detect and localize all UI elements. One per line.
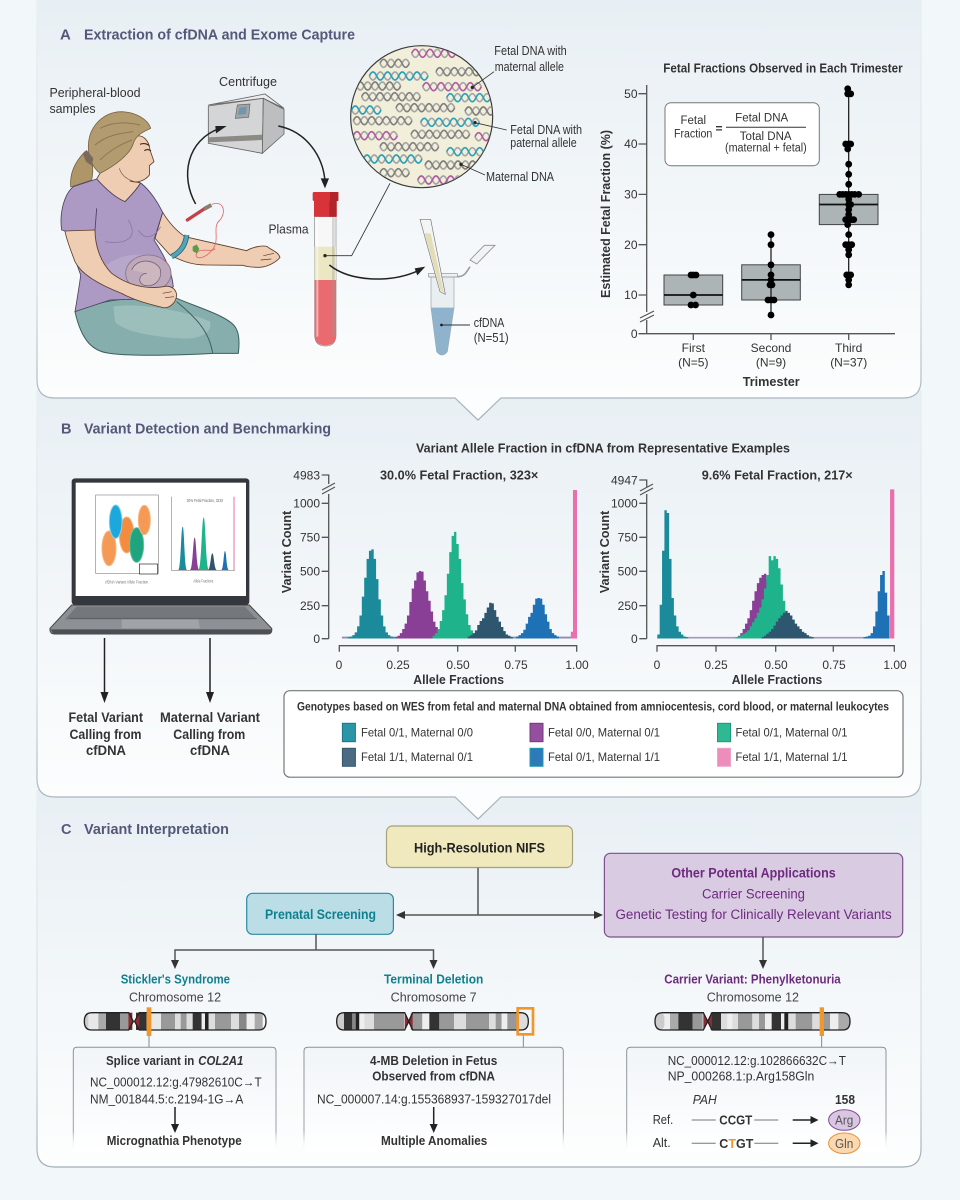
chart: fetal fractions boxplot — [598, 62, 903, 389]
panel B: variant detection — [37, 390, 921, 819]
y axis: 4947 — [611, 474, 638, 488]
y axis — [611, 474, 653, 646]
pants — [75, 298, 239, 355]
y axis — [293, 468, 335, 646]
text: carrier nomenclature: NP_000268.1:p.Arg158Gln — [668, 1070, 814, 1084]
chart: 9.6% fetal fraction histogram — [597, 467, 907, 687]
x axis: 0.75 — [504, 658, 528, 672]
y axis — [624, 85, 895, 341]
heading B: B — [61, 421, 71, 437]
laptop histogram — [172, 497, 235, 584]
neck and face — [97, 136, 154, 202]
label: fetal DNA with maternal allele — [494, 44, 567, 74]
text: variant nomenclature: NM_001844.5:c.2194-1G→A — [90, 1092, 244, 1106]
legend item: fetal 1/1 maternal 1/1: Fetal 1/1, Maternal 1/1 — [736, 750, 848, 764]
y axis: 0 — [631, 327, 638, 341]
histogram bars — [342, 490, 577, 638]
connector arrows from Prenatal Screening — [171, 934, 438, 969]
x axis labels: (N=37) — [830, 356, 867, 370]
formula box — [665, 103, 819, 166]
y axis title: Estimated Fetal Fraction (%) — [598, 130, 613, 298]
x axis title: Allele Fractions — [732, 672, 822, 687]
panel A: extraction of cfDNA — [37, 0, 921, 420]
y axis title: Variant Count — [597, 510, 612, 593]
y axis: 4983 — [293, 468, 320, 482]
legend item: fetal 1/1 maternal 1/1 — [718, 748, 848, 766]
arrow from Other Applications — [759, 937, 767, 969]
Terminal deletion column — [304, 971, 563, 1152]
box: Other Potential Applications — [604, 853, 903, 937]
alternate row: Alt. — [653, 1136, 671, 1150]
x axis labels: (N=5) — [678, 356, 708, 370]
laptop histogram: Allele Fractions — [193, 579, 214, 584]
formula box: Fetal — [681, 115, 706, 127]
box: second trimester — [742, 231, 800, 318]
legend item: fetal 0/1 maternal 1/1 — [530, 748, 660, 766]
label: maternal variant calling: cfDNA — [190, 743, 230, 758]
heading A: A — [60, 26, 71, 44]
icon: blood tube — [313, 192, 338, 346]
x axis — [336, 646, 589, 672]
label: fetal variant calling: cfDNA — [86, 743, 126, 758]
text: 4-MB deletion — [370, 1054, 497, 1084]
box: Other Potential Applications: Genetic Testing for Clinically Relevant Variants — [616, 907, 892, 922]
hair — [88, 112, 151, 173]
text: carrier nomenclature: NC_000012.12:g.102866632C→T — [668, 1054, 846, 1068]
text: carrier nomenclature — [668, 1054, 846, 1084]
x axis labels: Second — [751, 341, 791, 355]
leader: plasma to magnified circle — [324, 183, 390, 257]
y axis title: Variant Count — [279, 510, 294, 593]
icon: centrifuge — [208, 94, 284, 153]
text: variant nomenclature — [90, 1076, 262, 1106]
chart subtitle: 30.0% Fetal Fraction, 323× — [380, 467, 539, 482]
y axis: 250 — [618, 599, 638, 613]
connector arrows from NIFS — [396, 868, 603, 919]
formula box: Total DNA — [740, 131, 792, 143]
x axis: 0.75 — [822, 658, 846, 672]
x axis labels — [678, 341, 867, 370]
legend item: fetal 0/1 maternal 0/1 — [718, 723, 848, 742]
Stickler's syndrome column — [73, 971, 276, 1152]
label: peripheral blood samples: samples — [50, 102, 96, 116]
label: centrifuge: Centrifuge — [219, 75, 277, 89]
shirt — [61, 179, 173, 312]
text: splice variant: Splice variant in — [106, 1054, 194, 1068]
x axis: 1.00 — [883, 658, 907, 672]
chart title: Fetal Fractions Observed in Each Trimester — [663, 62, 903, 76]
alternate row — [653, 1133, 860, 1154]
x axis: 0.25 — [704, 658, 728, 672]
label: maternal DNA: Maternal DNA — [486, 170, 555, 184]
reference row: Arg — [835, 1114, 853, 1128]
y axis: 750 — [300, 530, 320, 544]
chart subtitle: 9.6% Fetal Fraction, 217× — [702, 467, 853, 482]
text: PAH gene label: PAH — [693, 1093, 718, 1107]
label: fetal DNA with paternal allele — [510, 123, 582, 150]
arrow: sample to centrifuge — [188, 126, 227, 204]
x axis: 0 — [654, 658, 661, 672]
x axis: 0.25 — [386, 658, 410, 672]
label: Terminal Deletion: Terminal Deletion — [384, 971, 483, 986]
label: maternal variant calling: Calling from — [173, 727, 245, 742]
label: plasma: Plasma — [268, 222, 309, 236]
label: cfDNA count: cfDNA — [474, 316, 505, 330]
chromosome 12 ideogram — [84, 1007, 266, 1047]
text: deletion nomenclature: NC_000007.14:g.155368937-159327017del — [317, 1092, 551, 1106]
heading C: Variant Interpretation — [84, 822, 229, 838]
label: fetal DNA with paternal allele: Fetal DNA with — [510, 123, 582, 137]
y axis: 0 — [313, 632, 320, 646]
text: splice variant — [106, 1054, 243, 1068]
label: Stickler's Syndrome: Stickler's Syndrome — [121, 971, 230, 986]
arm extended with hand — [155, 212, 280, 267]
y axis: 10 — [624, 288, 638, 302]
label: carrier variant: Carrier Variant: Phenylketonuria — [664, 971, 841, 986]
label: fetal DNA with maternal allele: maternal allele — [495, 60, 564, 74]
x axis labels: First — [682, 341, 706, 355]
box: High-Resolution NIFS: High-Resolution NIFS — [414, 839, 545, 855]
arm on belly with hand — [65, 230, 177, 308]
label: fetal DNA with maternal allele: Fetal DNA with — [494, 44, 567, 58]
y axis: 500 — [300, 564, 320, 578]
chart title: Variant Allele Fraction in cfDNA from Representative Examples — [416, 441, 790, 456]
reference row: CCGT — [719, 1114, 753, 1128]
laptop histogram: 30% Fetal Fraction, 323X — [187, 498, 224, 503]
label: maternal variant calling: Maternal Variant — [160, 710, 260, 725]
text: variant nomenclature: NC_000012.12:g.47982610C→T — [90, 1076, 262, 1090]
icon: microtube with pipette — [420, 219, 495, 355]
formula box: = — [716, 122, 723, 136]
label: maternal variant calling — [160, 710, 260, 758]
ponytail — [71, 152, 93, 187]
y axis: 50 — [624, 87, 638, 101]
label: fetal variant calling — [68, 710, 143, 758]
arrow down — [430, 1107, 438, 1133]
belly with fetus — [126, 255, 171, 292]
legend title: Genotypes based on WES from fetal and maternal DNA obtained from amniocentesis, cord blood, or maternal leukocytes — [297, 702, 889, 714]
label: Chromosome 7: Chromosome 7 — [391, 991, 477, 1005]
legend item: fetal 0/1 maternal 0/0 — [342, 723, 473, 742]
box: High-Resolution NIFS — [386, 826, 572, 868]
box: Other Potential Applications: Other Potental Applications — [671, 866, 836, 881]
leaders from DNA circle — [460, 72, 507, 175]
arm band — [172, 235, 187, 257]
arrow: centrifuge to tube — [278, 126, 329, 188]
y axis: 750 — [618, 530, 638, 544]
chromosome 12 ideogram — [655, 1007, 850, 1047]
label: peripheral blood samples — [50, 86, 141, 116]
box: Other Potential Applications: Carrier Screening — [702, 886, 805, 901]
heading B: Variant Detection and Benchmarking — [84, 421, 331, 437]
x axis: 1.00 — [565, 658, 589, 672]
legend: genotypes — [284, 691, 903, 777]
text: codon 158: 158 — [835, 1093, 855, 1107]
Carrier variant column — [627, 971, 886, 1154]
formula box: Fraction — [674, 128, 712, 140]
box: Prenatal Screening — [247, 893, 393, 934]
blood tube and tubing — [196, 203, 223, 258]
magnified DNA circle — [351, 46, 504, 188]
text: splice variant: COL2A1 — [198, 1054, 243, 1068]
x axis — [654, 646, 907, 672]
y axis: 30 — [624, 188, 638, 202]
label: cfDNA count — [440, 316, 509, 345]
y axis: 0 — [631, 632, 638, 646]
label: fetal variant calling: Calling from — [70, 727, 142, 742]
heading C: C — [61, 822, 72, 838]
icon: laptop — [50, 478, 272, 634]
laptop scatter plot: cfDNA Variant Allele Fraction — [105, 580, 149, 585]
laptop scatter plot — [96, 495, 158, 585]
text: multiple anomalies: Multiple Anomalies — [381, 1134, 487, 1148]
box: third trimester — [819, 85, 878, 288]
arrows from laptop — [100, 638, 214, 703]
arrow down — [171, 1107, 179, 1133]
text: 4-MB deletion: Observed from cfDNA — [372, 1070, 495, 1084]
reference row: Ref. — [653, 1113, 673, 1127]
x axis labels: (N=9) — [756, 356, 786, 370]
y axis: 40 — [624, 137, 638, 151]
histogram bars — [657, 489, 894, 638]
x axis: 0 — [336, 658, 343, 672]
formula box: (maternal + fetal) — [725, 143, 807, 155]
chart: 30.0% fetal fraction histogram — [279, 467, 589, 687]
box: first trimester — [664, 272, 723, 308]
x axis: 0.50 — [764, 658, 788, 672]
detail box — [627, 1047, 886, 1152]
illustration: pregnant woman — [61, 112, 280, 355]
y axis: 20 — [624, 238, 638, 252]
detail box — [73, 1047, 276, 1152]
label: Chromosome 12: Chromosome 12 — [707, 991, 799, 1005]
detail box — [304, 1047, 563, 1152]
legend item: fetal 1/1 maternal 0/1 — [342, 748, 473, 766]
alternate row: Gln — [835, 1137, 853, 1151]
y axis: 1000 — [293, 496, 320, 510]
x axis labels: Third — [835, 341, 862, 355]
arrow: tube to microtube — [329, 265, 425, 279]
formula box: Fetal DNA — [735, 113, 789, 125]
x axis: 0.50 — [446, 658, 470, 672]
legend item: fetal 0/0 maternal 0/1 — [530, 723, 660, 742]
label: fetal variant calling: Fetal Variant — [68, 710, 143, 725]
label: Chromosome 12: Chromosome 12 — [129, 991, 221, 1005]
label: fetal DNA with paternal allele: paternal allele — [510, 136, 577, 150]
y axis: 250 — [300, 599, 320, 613]
label: peripheral blood samples: Peripheral-blood — [50, 86, 141, 100]
reference row — [653, 1110, 860, 1130]
x axis title: Allele Fractions — [413, 672, 504, 687]
label: cfDNA count: (N=51) — [474, 331, 509, 345]
DNA fragments — [352, 49, 504, 184]
text: micrognathia phenotype: Micrognathia Phenotype — [107, 1134, 242, 1148]
text: 4-MB deletion: 4-MB Deletion in Fetus — [370, 1054, 497, 1068]
legend item: fetal 1/1 maternal 0/1: Fetal 1/1, Maternal 0/1 — [361, 750, 473, 764]
panel C: variant interpretation — [37, 790, 921, 1167]
box: Prenatal Screening: Prenatal Screening — [265, 907, 376, 922]
chromosome 7 ideogram — [337, 1008, 533, 1047]
y axis: 1000 — [611, 496, 638, 510]
legend item: fetal 0/1 maternal 0/0: Fetal 0/1, Maternal 0/0 — [361, 726, 473, 740]
legend item: fetal 0/1 maternal 0/1: Fetal 0/1, Maternal 0/1 — [736, 726, 848, 740]
legend item: fetal 0/0 maternal 0/1: Fetal 0/0, Maternal 0/1 — [548, 726, 660, 740]
alternate row: CTGT — [719, 1137, 754, 1151]
y axis: 500 — [618, 564, 638, 578]
heading A: Extraction of cfDNA and Exome Capture — [84, 26, 355, 44]
x axis title: Trimester — [743, 374, 800, 389]
legend item: fetal 0/1 maternal 1/1: Fetal 0/1, Maternal 1/1 — [548, 750, 660, 764]
